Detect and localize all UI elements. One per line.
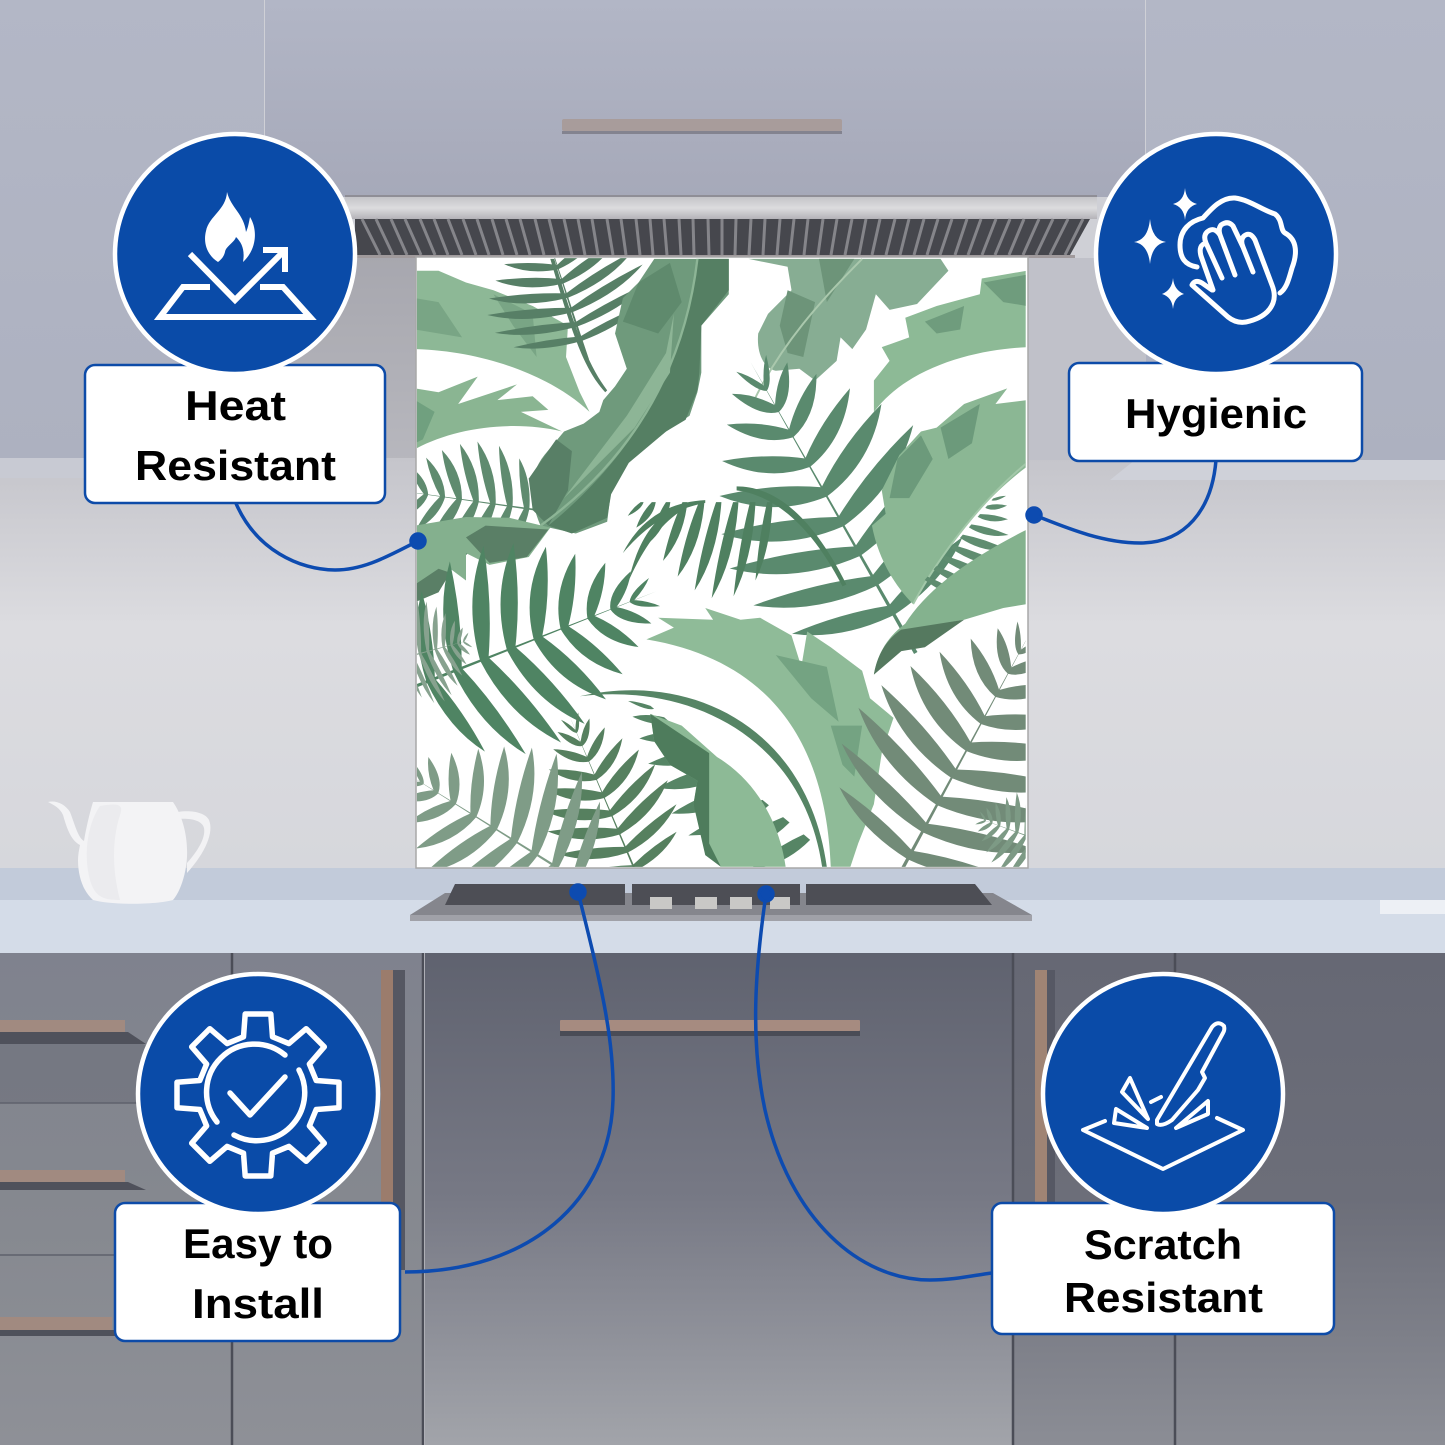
connector: scratch resistant: [756, 887, 992, 1280]
callout: heat resistant: [85, 134, 385, 503]
lower cabinet left door: [233, 953, 423, 1445]
wall shadow: [264, 258, 417, 458]
palm: bottom right: [787, 572, 1134, 949]
leaf: left middle: [415, 377, 562, 449]
leaf: top left: [415, 271, 590, 412]
palm: left lower: [353, 493, 695, 794]
lower cabinet left drawers: [0, 953, 232, 1445]
drawer handles: [0, 1020, 146, 1336]
palm: left edge: [379, 589, 485, 712]
leaf: large dark: [529, 259, 729, 533]
label text: Easy to: [183, 1220, 333, 1267]
palm: bottom left: [352, 690, 656, 979]
lower cabinet centre: [425, 953, 1013, 1445]
label text: Heat: [185, 382, 286, 429]
upper cabinet centre: [265, 0, 1145, 197]
cooktop: [410, 884, 1032, 921]
label box: [115, 1203, 400, 1341]
upper cabinet right: [1146, 0, 1445, 460]
panel: tropical leaf splashback: [415, 256, 1029, 869]
label box: [992, 1203, 1334, 1334]
worktop front: [0, 900, 1445, 953]
leaf: top right: [874, 271, 1027, 412]
left door handle: [381, 970, 405, 1270]
worktop back: [0, 868, 1445, 902]
leaf: right large: [872, 388, 1027, 604]
icon: heat circle: [115, 134, 355, 374]
leaf: top centre: [748, 259, 948, 404]
palm: bottom small: [509, 689, 705, 920]
teapot: [48, 801, 210, 904]
leaf: bottom centre: [646, 608, 894, 867]
leaf: bottom small: [650, 714, 786, 867]
connector: easy to install: [405, 885, 613, 1272]
label text: Resistant: [1064, 1274, 1263, 1321]
palm: far right: [961, 773, 1082, 895]
palm: centre top: [646, 302, 1020, 712]
leaf: lower left: [415, 517, 550, 602]
lower cabinet right door: [1014, 953, 1175, 1445]
palm: top left: [464, 193, 665, 392]
callout: scratch resistant: [992, 974, 1334, 1334]
right door handle: [1035, 970, 1055, 1205]
label text: Scratch: [1084, 1221, 1242, 1268]
icon: gear circle: [138, 974, 378, 1214]
top handle: [562, 119, 842, 134]
label text: Hygienic: [1125, 390, 1307, 437]
label text: Install: [192, 1280, 324, 1327]
callout: hygienic: [1069, 134, 1362, 461]
palm: bottom centre arc: [580, 690, 827, 867]
callout: easy to install: [115, 974, 400, 1341]
label text: Resistant: [135, 442, 336, 489]
palm: left small: [377, 430, 559, 571]
lower cabinet far right: [1176, 953, 1445, 1445]
leaf: right lower: [874, 530, 1027, 675]
cabinet underside right: [1110, 460, 1445, 480]
connector: hygienic: [1027, 460, 1216, 543]
palm: right inner: [925, 496, 1008, 588]
extractor hood: [345, 195, 1097, 256]
connector: heat resistant: [235, 501, 425, 570]
cabinet underside left: [0, 458, 84, 478]
palm: centre drooping: [623, 486, 846, 598]
upper cabinet left: [0, 0, 264, 458]
icon: scratch circle: [1043, 974, 1283, 1214]
wall right of panel: [1028, 258, 1148, 460]
icon: hygiene circle: [1096, 134, 1336, 374]
label box: [1069, 363, 1362, 461]
label box: [85, 365, 385, 503]
centre door handle: [560, 1020, 860, 1036]
